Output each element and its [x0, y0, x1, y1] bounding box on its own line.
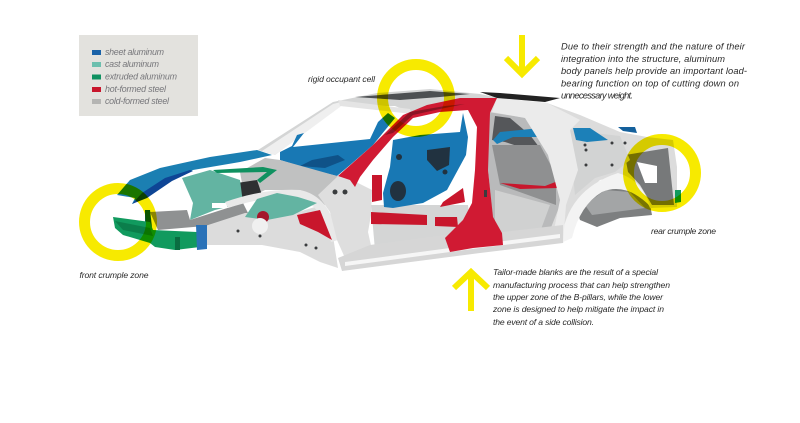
arrow: down [506, 35, 538, 74]
hood in sheet aluminum [117, 150, 272, 204]
yellow ring: rigid occupant cell [382, 64, 450, 132]
windshield frame and roof [258, 89, 500, 155]
text block: aluminum body panels [561, 42, 747, 100]
rear trunk frame interior [625, 148, 674, 205]
door panel inner in sheet aluminum [383, 113, 468, 208]
door panel holes [390, 147, 450, 201]
panel: legend: sheet aluminum [105, 47, 164, 57]
label: rear crumple zone: rear crumple zone [651, 226, 716, 236]
panel: legend: cast aluminum [105, 59, 159, 69]
green rear crash piece [675, 190, 681, 203]
green extruded front bumper [113, 217, 200, 250]
red floor members [371, 175, 465, 227]
body detail holes [236, 142, 626, 250]
sill [338, 225, 563, 271]
rear wheel arch highlight [561, 173, 650, 243]
rear underbody [578, 183, 652, 227]
red circle in arch [257, 211, 269, 223]
blue crash bracket [196, 225, 207, 250]
c-pillar white band [492, 98, 580, 243]
rear blue shelf [493, 128, 563, 144]
arrow: up [454, 272, 488, 311]
front lower white rail and body [205, 206, 338, 268]
text block: tailor-made blanks [492, 267, 670, 327]
text block: tailor-made blanks: the upper zone of the B-pillars, while the lower [493, 292, 664, 302]
car body structure illustration [113, 89, 681, 271]
rear fenders and dark engine bay [237, 180, 262, 205]
rear body side and trunk [490, 98, 677, 243]
red front footwell [297, 210, 332, 240]
text block: aluminum body panels: Due to their strength and the nature of their [561, 42, 746, 52]
cabin floor [371, 205, 470, 250]
text block: tailor-made blanks: manufacturing process that can help strengthen [493, 280, 670, 290]
text block: aluminum body panels: unnecessary weight. [561, 90, 633, 100]
front upper structure gray [240, 158, 352, 205]
label: rigid occupant cell: rigid occupant cell [308, 74, 376, 84]
yellow ring: rear crumple zone [628, 140, 696, 206]
text block: tailor-made blanks: zone is designed to help mitigate the impact in [492, 304, 664, 314]
green extruded strut brace [213, 167, 277, 183]
text block: aluminum body panels: bearing function on top of cutting down on [561, 78, 739, 88]
rear cabin interior [488, 112, 562, 240]
front gray rail [150, 203, 250, 230]
label: front crumple zone: front crumple zone [80, 270, 149, 280]
text block: tailor-made blanks: the event of a side collision. [493, 317, 594, 327]
yellow ring: front crumple zone [84, 188, 152, 256]
text block: aluminum body panels: body panels help provide an important load- [561, 66, 747, 76]
firewall in sheet aluminum [280, 113, 395, 176]
text block: tailor-made blanks: Tailor-made blanks are the result of a special [493, 267, 659, 277]
panel: legend: cold-formed steel [105, 96, 170, 106]
front crash box rail dark mount [145, 210, 152, 227]
front teal wheel arch [245, 193, 317, 220]
text block: aluminum body panels: integration into the structure, aluminum [561, 54, 725, 64]
wheel arch white band [225, 190, 338, 242]
front door opening pillar [318, 176, 372, 258]
panel: legend: hot-formed steel [105, 84, 167, 94]
hood underside [132, 170, 193, 204]
panel: legend [79, 35, 198, 116]
red a-pillar roof rail and b-pillar [338, 98, 503, 252]
engine bay teal shock tower [182, 170, 243, 220]
panel: legend: extruded aluminum [105, 72, 177, 82]
